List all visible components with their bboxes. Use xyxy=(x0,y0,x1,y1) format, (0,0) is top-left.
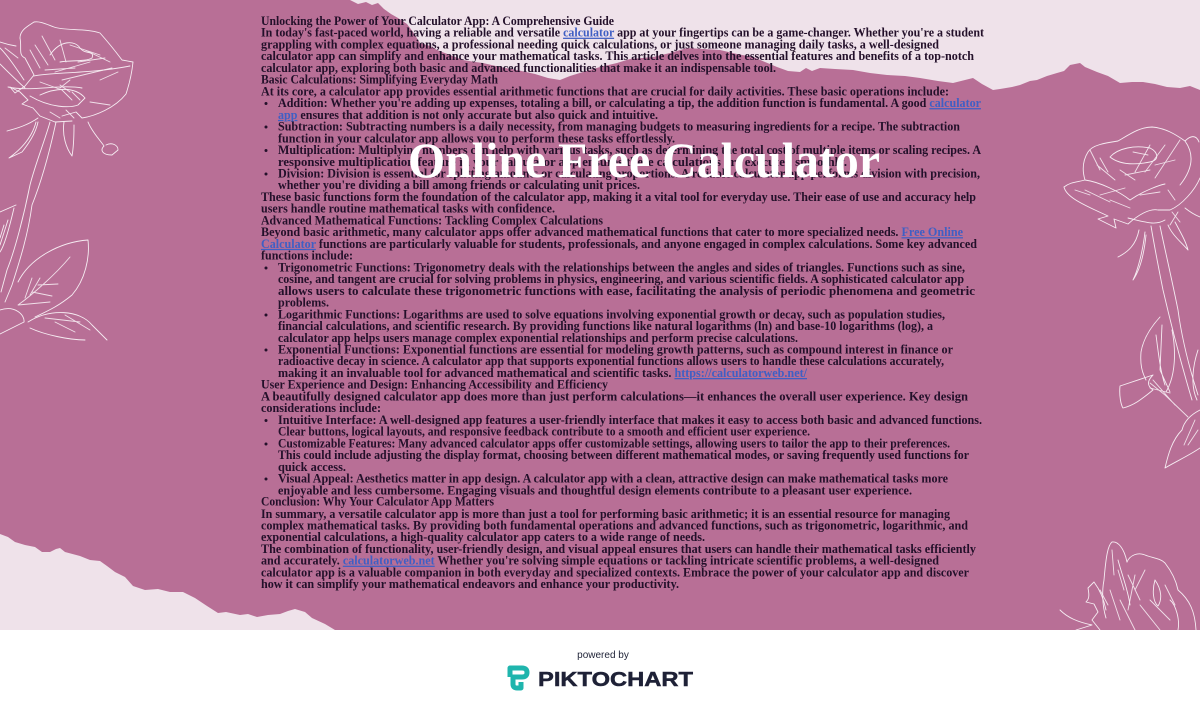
text block: conclusion: In summary, a versatile calculator app is more than just a tool for performing basic arithmetic; it is an essential resource for managing xyxy=(261,507,951,521)
list: design considerations: Visual Appeal: Aesthetics matter in app design. A calculator app with a clean, attractive design can make mathematical tasks more xyxy=(278,472,948,486)
list: design considerations: enjoyable and less cumbersome. Engaging visuals and thoughtful design elements contribute to a pleasant user experience. xyxy=(278,483,912,497)
list: basic operations: Multiplication: Multiplying numbers can help with various tasks, such as determining the total cost of multiple items or scaling recipes. A xyxy=(278,143,981,157)
text block: basic summary: These basic functions form the foundation of the calculator app, making it a vital tool for everyday use. Their ease of use and accuracy help xyxy=(261,190,976,204)
list: advanced functions: calculator app helps users manage complex exponential relationships and perform precise calculations. xyxy=(278,331,798,345)
list: design considerations: Clear buttons, logical layouts, and responsive feedback contribute to a smooth and efficient user experience. xyxy=(278,425,810,439)
list: advanced functions: making it an invaluable tool for advanced mathematical and scientific tasks. https://calculatorweb.net/ xyxy=(278,366,807,380)
text block: basic intro: At its core, a calculator app provides essential arithmetic functions that are crucial for daily activities. These basic operations include: xyxy=(261,84,949,98)
list: advanced functions: problems. xyxy=(278,296,329,310)
list: advanced functions: cosine, and tangent are crucial for solving problems in physics, engineering, and various scientific fields. A sophisticated calculator app xyxy=(278,272,964,286)
list: basic operations xyxy=(278,96,981,192)
text block: advanced intro xyxy=(261,225,977,263)
text block: introduction: In today's fast-paced world, having a reliable and versatile calculator app at your fingertips can be a game-changer. Whether you're a student xyxy=(261,26,985,40)
list: advanced functions: radioactive decay in science. A calculator app that supports exponential functions allows users to handle these calculations accurately, xyxy=(278,354,944,368)
list: advanced functions: allows users to calculate these trigonometric functions with ease, facilitating the analysis of periodic phenomena and geometric xyxy=(278,284,975,298)
heading: advanced functions: Advanced Mathematical Functions: Tackling Complex Calculations xyxy=(261,213,603,227)
text block: conclusion: complex mathematical tasks. By providing both fundamental operations and advanced functions, such as trigonometric, logarithmic, and xyxy=(261,518,968,532)
text block: design intro: A beautifully designed calculator app does more than just perform calculations—it enhances the overall user experience. Key design xyxy=(261,389,968,403)
list: design considerations: quick access. xyxy=(278,460,346,474)
list: design considerations xyxy=(278,413,982,497)
text block: conclusion: how it can simplify your mathematical endeavors and enhance your productivity. xyxy=(261,577,679,591)
text block: design intro: considerations include: xyxy=(261,401,381,415)
footer band xyxy=(0,630,1200,710)
heading: user experience: User Experience and Design: Enhancing Accessibility and Efficiency xyxy=(261,378,609,392)
text block: advanced intro: Beyond basic arithmetic, many calculator apps offer advanced mathematical functions that cater to more specialized needs. Free Online xyxy=(261,225,963,239)
text block: basic summary: users handle routine mathematical tasks with confidence. xyxy=(261,202,555,216)
text block: basic summary xyxy=(261,190,976,216)
list: advanced functions xyxy=(278,260,975,380)
torn paper: bottom left xyxy=(0,534,335,630)
list: design considerations: Customizable Features: Many advanced calculator apps offer customizable settings, allowing users to tailor the app to their preferences. xyxy=(278,436,950,450)
text block: conclusion: and accurately. calculatorweb.net Whether you're solving simple equations or tackling intricate scientific problems, a well-designed xyxy=(261,554,939,568)
text block: conclusion: calculator app is a valuable companion in both everyday and specialized contexts. Embrace the power of your calculator app and discover xyxy=(261,565,969,579)
list: advanced functions: Exponential Functions: Exponential functions are essential for modeling growth patterns, such as compound interest in finance or xyxy=(278,342,953,356)
list: basic operations: whether you're dividing a bill among friends or calculating unit prices. xyxy=(278,178,640,192)
logo: Piktochart icon xyxy=(510,668,527,688)
text block: introduction: calculator app, exploring both basic and advanced functionalities that make it an indispensable tool. xyxy=(261,61,776,75)
text block: advanced intro: functions include: xyxy=(261,249,353,263)
list: basic operations: app ensures that addition is not only accurate but also quick and intuitive. xyxy=(278,108,658,122)
list: advanced functions: financial calculations, and scientific research. By providing functions like natural logarithms (ln) and base-10 logarithms (log), a xyxy=(278,319,934,333)
text block: introduction: grappling with complex equations, a professional needing quick calculations, or just someone managing daily tasks, a well-designed xyxy=(261,38,939,52)
heading: basic calculations: Basic Calculations: Simplifying Everyday Math xyxy=(261,73,498,87)
heading: conclusion: Conclusion: Why Your Calculator App Matters xyxy=(261,494,494,508)
list: basic operations: Division: Division is essential for splitting amounts or calculating proportions. A reliable calculator app performs division with precision, xyxy=(278,166,980,180)
title: Online Free Calculator xyxy=(408,132,880,188)
article text xyxy=(261,14,985,591)
list: design considerations: Intuitive Interface: A well-designed app features a user-friendly interface that makes it easy to access both basic and advanced functions. xyxy=(278,413,982,427)
text block: conclusion xyxy=(261,507,977,591)
list bullets xyxy=(264,102,268,480)
footer: powered by: powered by xyxy=(577,650,629,661)
list: advanced functions: Trigonometric Functions: Trigonometry deals with the relationships between the angles and sides of triangles. Functions such as sine, xyxy=(278,260,965,274)
text block: advanced intro: Calculator functions are particularly valuable for students, professionals, and anyone engaged in complex calculations. Some key advanced xyxy=(261,237,977,251)
logo: Piktochart wordmark: PIKTOCHART xyxy=(538,668,694,691)
list: design considerations: This could include adjusting the display format, choosing between different mathematical modes, or saving frequently used functions for xyxy=(278,448,969,462)
heading: guide title: Unlocking the Power of Your Calculator App: A Comprehensive Guide xyxy=(261,14,614,28)
list: basic operations: responsive multiplication feature in your calculator app ensures these calculations are executed smoothly. xyxy=(278,155,847,169)
text block: conclusion: The combination of functionality, user-friendly design, and visual appeal ensures that users can handle their mathematical tasks efficiently xyxy=(261,542,977,556)
text block: design intro xyxy=(261,389,968,415)
list: advanced functions: Logarithmic Functions: Logarithms are used to solve equations involving exponential growth or decay, such as population studies, xyxy=(278,307,945,321)
illustration: right rose xyxy=(1064,127,1200,468)
torn paper: top right xyxy=(350,0,1200,90)
text block: introduction xyxy=(261,26,985,75)
text block: introduction: calculator app can simplify and enhance your mathematical tasks. This article delves into the essential features and benefits of a top-notch xyxy=(261,49,974,63)
list: basic operations: Addition: Whether you're adding up expenses, totaling a bill, or calculating a tip, the addition function is fundamental. A good calculator xyxy=(278,96,981,110)
illustration: left rose xyxy=(0,22,133,340)
illustration: bottom right rose xyxy=(1060,542,1196,630)
text block: conclusion: exponential calculations, a high-quality calculator app caters to a wide range of needs. xyxy=(261,530,705,544)
list: basic operations: Subtraction: Subtracting numbers is a daily necessity, from managing budgets to measuring ingredients for a recipe. The subtraction xyxy=(278,120,960,134)
list: basic operations: function in your calculator app allows you to perform these tasks effortlessly. xyxy=(278,131,675,145)
